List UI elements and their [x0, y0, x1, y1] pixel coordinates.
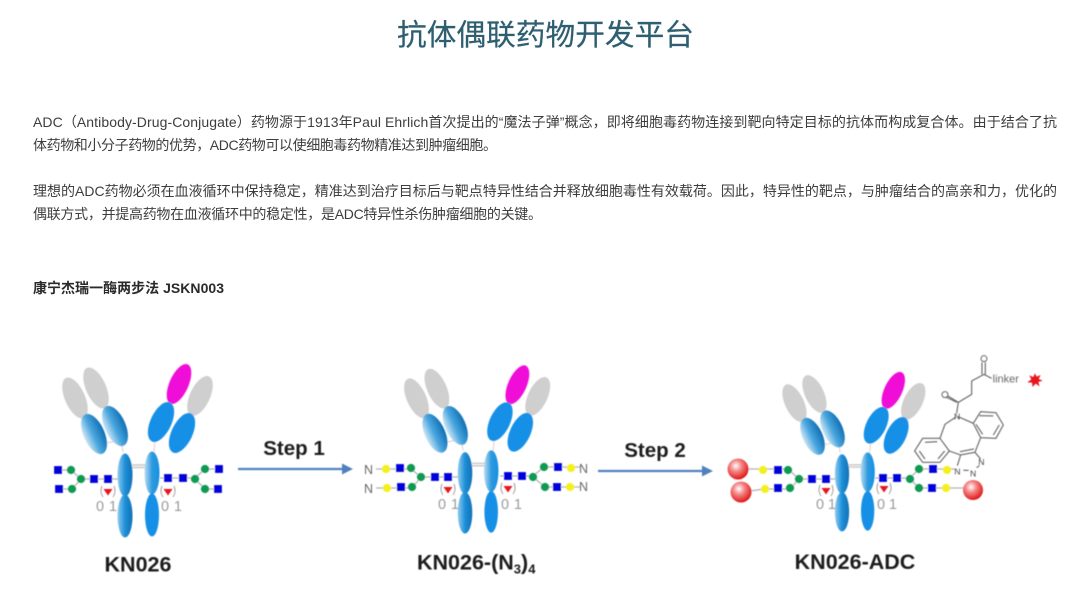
atom labels: linker [993, 374, 1019, 386]
fucose markers: N3 [438, 483, 522, 513]
triazole ring [957, 452, 981, 470]
atom labels: N [970, 469, 976, 479]
label: KN026-(N3)4: 3 [514, 562, 521, 576]
glycans: KN026 right [160, 465, 222, 493]
fucose markers: ADC [816, 483, 897, 513]
text block: ADC introduction: 体药物和小分子药物的优势，ADC药物可以使细胞毒药物精准达到肿瘤细胞。 [33, 137, 497, 153]
label: KN026-ADC: KN026-ADC [795, 550, 915, 574]
fucose markers: N3: 0 1 [501, 497, 522, 513]
glycans: N3 left [364, 463, 458, 496]
arrow: step 2: Step 2 [624, 439, 686, 462]
right benzene ring [973, 412, 1003, 438]
diagram: two-step conjugation [54, 356, 1043, 576]
carbonyl oxygen left [942, 392, 948, 398]
text block: ideal ADC drug: 理想的ADC药物必须在血液循环中保持稳定，精准达到治疗目标后与靶点特异性结合并释放细胞毒性有效载荷。因此，特异性的靶点，与肿瘤结合的高亲和力，优化的 [33, 183, 1057, 199]
title: 抗体偶联药物开发平台 [397, 19, 694, 52]
label: KN026: KN026 [105, 552, 171, 576]
atom labels [954, 374, 1019, 479]
glycans: N3 right [500, 462, 588, 494]
glycans: N3 right: N [579, 462, 588, 476]
text block: ideal ADC drug [33, 183, 1057, 222]
arrow: step 1 [238, 437, 353, 474]
text block: ADC introduction [33, 114, 1057, 153]
arrow: step 1: Step 1 [263, 437, 325, 460]
glycans: N3 left: N [364, 463, 373, 477]
fucose markers: KN026 [96, 486, 182, 515]
antibody: KN026-(N3)4 [364, 362, 588, 534]
antibody: KN026-ADC [728, 369, 983, 532]
glycans: N3 right: N [579, 480, 588, 494]
glycans and payload: ADC right [875, 465, 983, 500]
chemical structure: linker and triazole [915, 356, 1043, 479]
subheading: 康宁杰瑞一酶两步法 JSKN003 [33, 280, 224, 296]
left benzene ring [915, 438, 949, 462]
fucose markers: KN026: 0 1 [161, 499, 182, 515]
arrow: step 2 [598, 439, 713, 476]
antibody: KN026 [54, 360, 222, 538]
glycans: KN026 left [54, 466, 118, 493]
atom labels: N [954, 411, 960, 421]
acyl chain [946, 362, 992, 413]
glycans and payload: ADC left [728, 458, 835, 502]
fucose markers: N3: 0 1 [438, 497, 459, 513]
text block: ADC introduction: ADC（Antibody-Drug-Conjugate）药物源于1913年Paul Ehrlich首次提出的“魔法子弹”概念，即将细胞毒药物连接到靶向特定目标的抗体而构成复合体。由于结合了抗 [33, 114, 1057, 130]
label: KN026-(N3)4: KN026-(N [417, 550, 514, 574]
fucose markers: ADC: 0 1 [877, 497, 897, 513]
text block: ideal ADC drug: 偶联方式，并提高药物在血液循环中的稳定性，是ADC特异性杀伤肿瘤细胞的关键。 [33, 206, 542, 222]
icon: red payload star [1027, 373, 1043, 387]
label: KN026-(N3)4: 4 [528, 562, 536, 576]
carbonyl oxygen top [981, 356, 987, 362]
fucose markers: KN026: 0 1 [96, 499, 117, 515]
label: KN026-(N3)4: ) [521, 550, 528, 574]
fucose markers: ADC: 0 1 [816, 497, 836, 513]
glycans: N3 left: N [364, 482, 373, 496]
atom labels: N [954, 466, 961, 476]
eight-membered ring [940, 417, 981, 455]
atom labels: N [978, 457, 985, 467]
